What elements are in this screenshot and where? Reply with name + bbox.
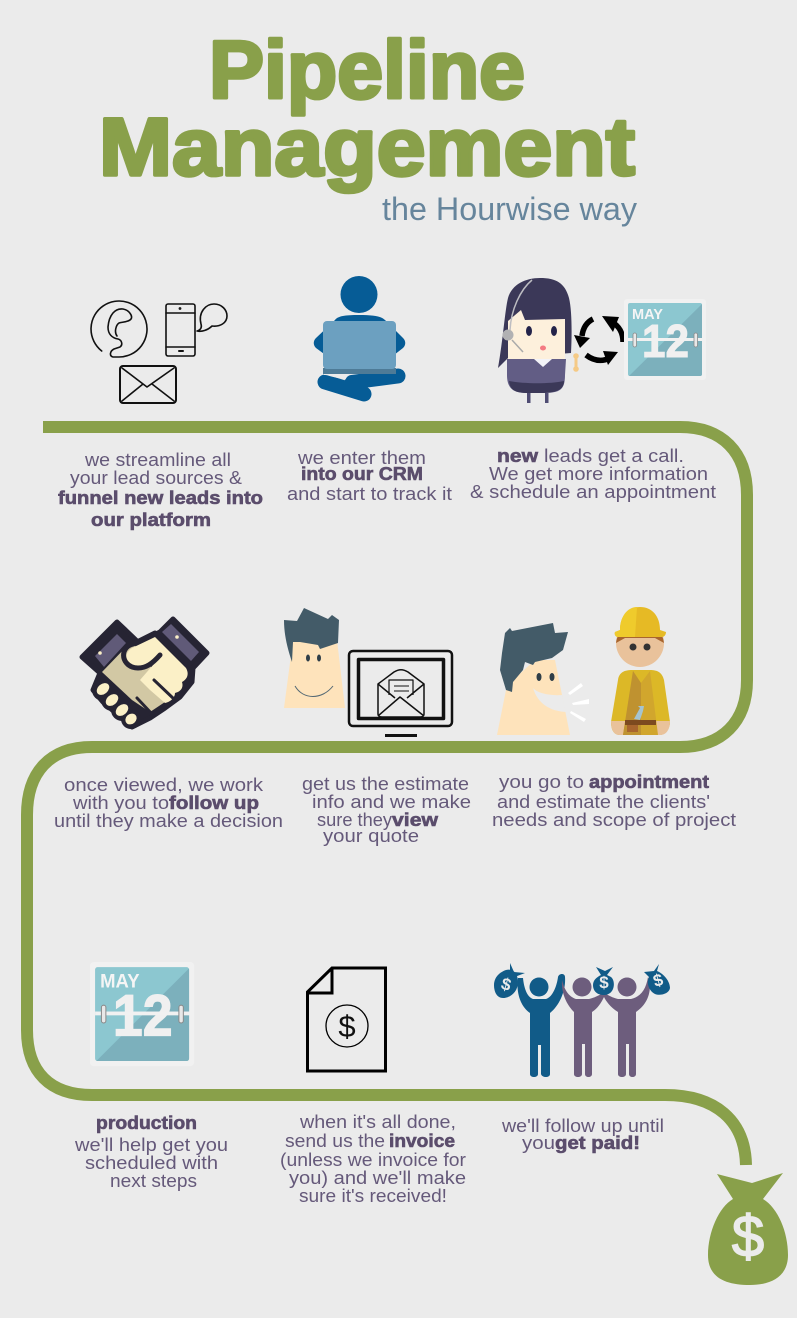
text: step 6: and estimate the clients': [497, 792, 710, 812]
text: step 8: you) and we'll make: [289, 1168, 466, 1188]
title: [99, 25, 635, 193]
icon: cycle arrows: [574, 316, 623, 365]
text: step 7: production: [96, 1113, 197, 1133]
text: step 6: you go to: [499, 772, 584, 792]
text: step 8: (unless we invoice for: [280, 1150, 466, 1170]
icon: phone, mobile and envelope: [91, 301, 227, 403]
text: step 3: leads get a call.: [544, 446, 684, 466]
text: step 3: new: [497, 446, 539, 466]
icon: people holding money bags: [494, 963, 670, 1077]
text: step 7: [74, 1113, 228, 1191]
text: step 3: [470, 446, 716, 502]
text: step 5: your quote: [323, 826, 419, 846]
text: step 5: get us the estimate: [302, 774, 469, 794]
text: step 4: follow up: [169, 793, 259, 813]
icon: construction worker: [611, 607, 670, 735]
icon: calendar: MAY: [632, 306, 663, 323]
text: step 9: get paid!: [555, 1133, 640, 1153]
text: step 1: funnel new leads into: [58, 488, 263, 508]
text: step 9: [501, 1116, 664, 1153]
icon: invoice document: $: [338, 1009, 356, 1044]
text: step 4: with you to: [72, 793, 169, 813]
text: step 5: sure they: [317, 810, 392, 830]
text: step 2: and start to track it: [287, 484, 452, 504]
text: step 1: we streamline all: [84, 450, 231, 470]
icon: call agent woman: [498, 278, 579, 403]
icon: man talking: [497, 623, 589, 735]
text: step 7: scheduled with: [85, 1153, 218, 1173]
text: step 9: you: [522, 1133, 555, 1153]
icon: monitor with envelope: [349, 651, 452, 736]
text: step 2: [287, 448, 452, 504]
text: step 5: [302, 774, 471, 846]
text: step 7: next steps: [110, 1171, 197, 1191]
text: step 5: view: [392, 810, 439, 830]
icon: smiling man: [284, 608, 345, 708]
icon: people holding money bags: $: [499, 974, 514, 995]
pipeline path: [27, 427, 747, 1165]
text: step 6: [492, 772, 736, 830]
text: step 9: we'll follow up until: [501, 1116, 664, 1136]
text: step 8: [280, 1112, 466, 1206]
text: step 8: sure it's received!: [299, 1186, 447, 1206]
icon: people holding money bags: $: [651, 970, 666, 991]
text: step 8: send us the: [285, 1131, 385, 1151]
text: step 7: we'll help get you: [74, 1135, 228, 1155]
text: step 3: & schedule an appointment: [470, 482, 716, 502]
text: step 4: until they make a decision: [54, 811, 283, 831]
text: step 5: info and we make: [312, 792, 471, 812]
text: step 3: We get more information: [489, 464, 708, 484]
icon: person at laptop: [314, 276, 405, 394]
icon: calendar: 12: [642, 315, 689, 367]
text: step 8: invoice: [389, 1131, 455, 1151]
text: step 1: your lead sources &: [70, 468, 242, 488]
subtitle: the Hourwise way: [382, 191, 637, 227]
text: step 6: needs and scope of project: [492, 810, 736, 830]
text: step 1: [58, 450, 263, 530]
text: step 2: we enter them: [297, 448, 426, 468]
text: step 1: our platform: [91, 510, 211, 530]
icon: money bag: [708, 1173, 788, 1285]
icon: people holding money bags: $: [599, 973, 609, 992]
icon: calendar: 12: [113, 984, 173, 1049]
title: Management: [99, 102, 635, 193]
icon: calendar: [90, 962, 194, 1066]
icon: handshake: [82, 619, 207, 729]
title: Pipeline: [209, 25, 525, 116]
text: step 4: [54, 775, 283, 831]
icon: calendar: [624, 299, 706, 380]
text: step 8: when it's all done,: [299, 1112, 456, 1132]
icon: invoice document: [308, 968, 386, 1071]
text: step 4: once viewed, we work: [64, 775, 264, 795]
icon: calendar: MAY: [100, 971, 140, 992]
text: step 2: into our CRM: [301, 464, 423, 484]
icon: money bag: $: [732, 1204, 764, 1269]
text: step 6: appointment: [589, 772, 709, 792]
